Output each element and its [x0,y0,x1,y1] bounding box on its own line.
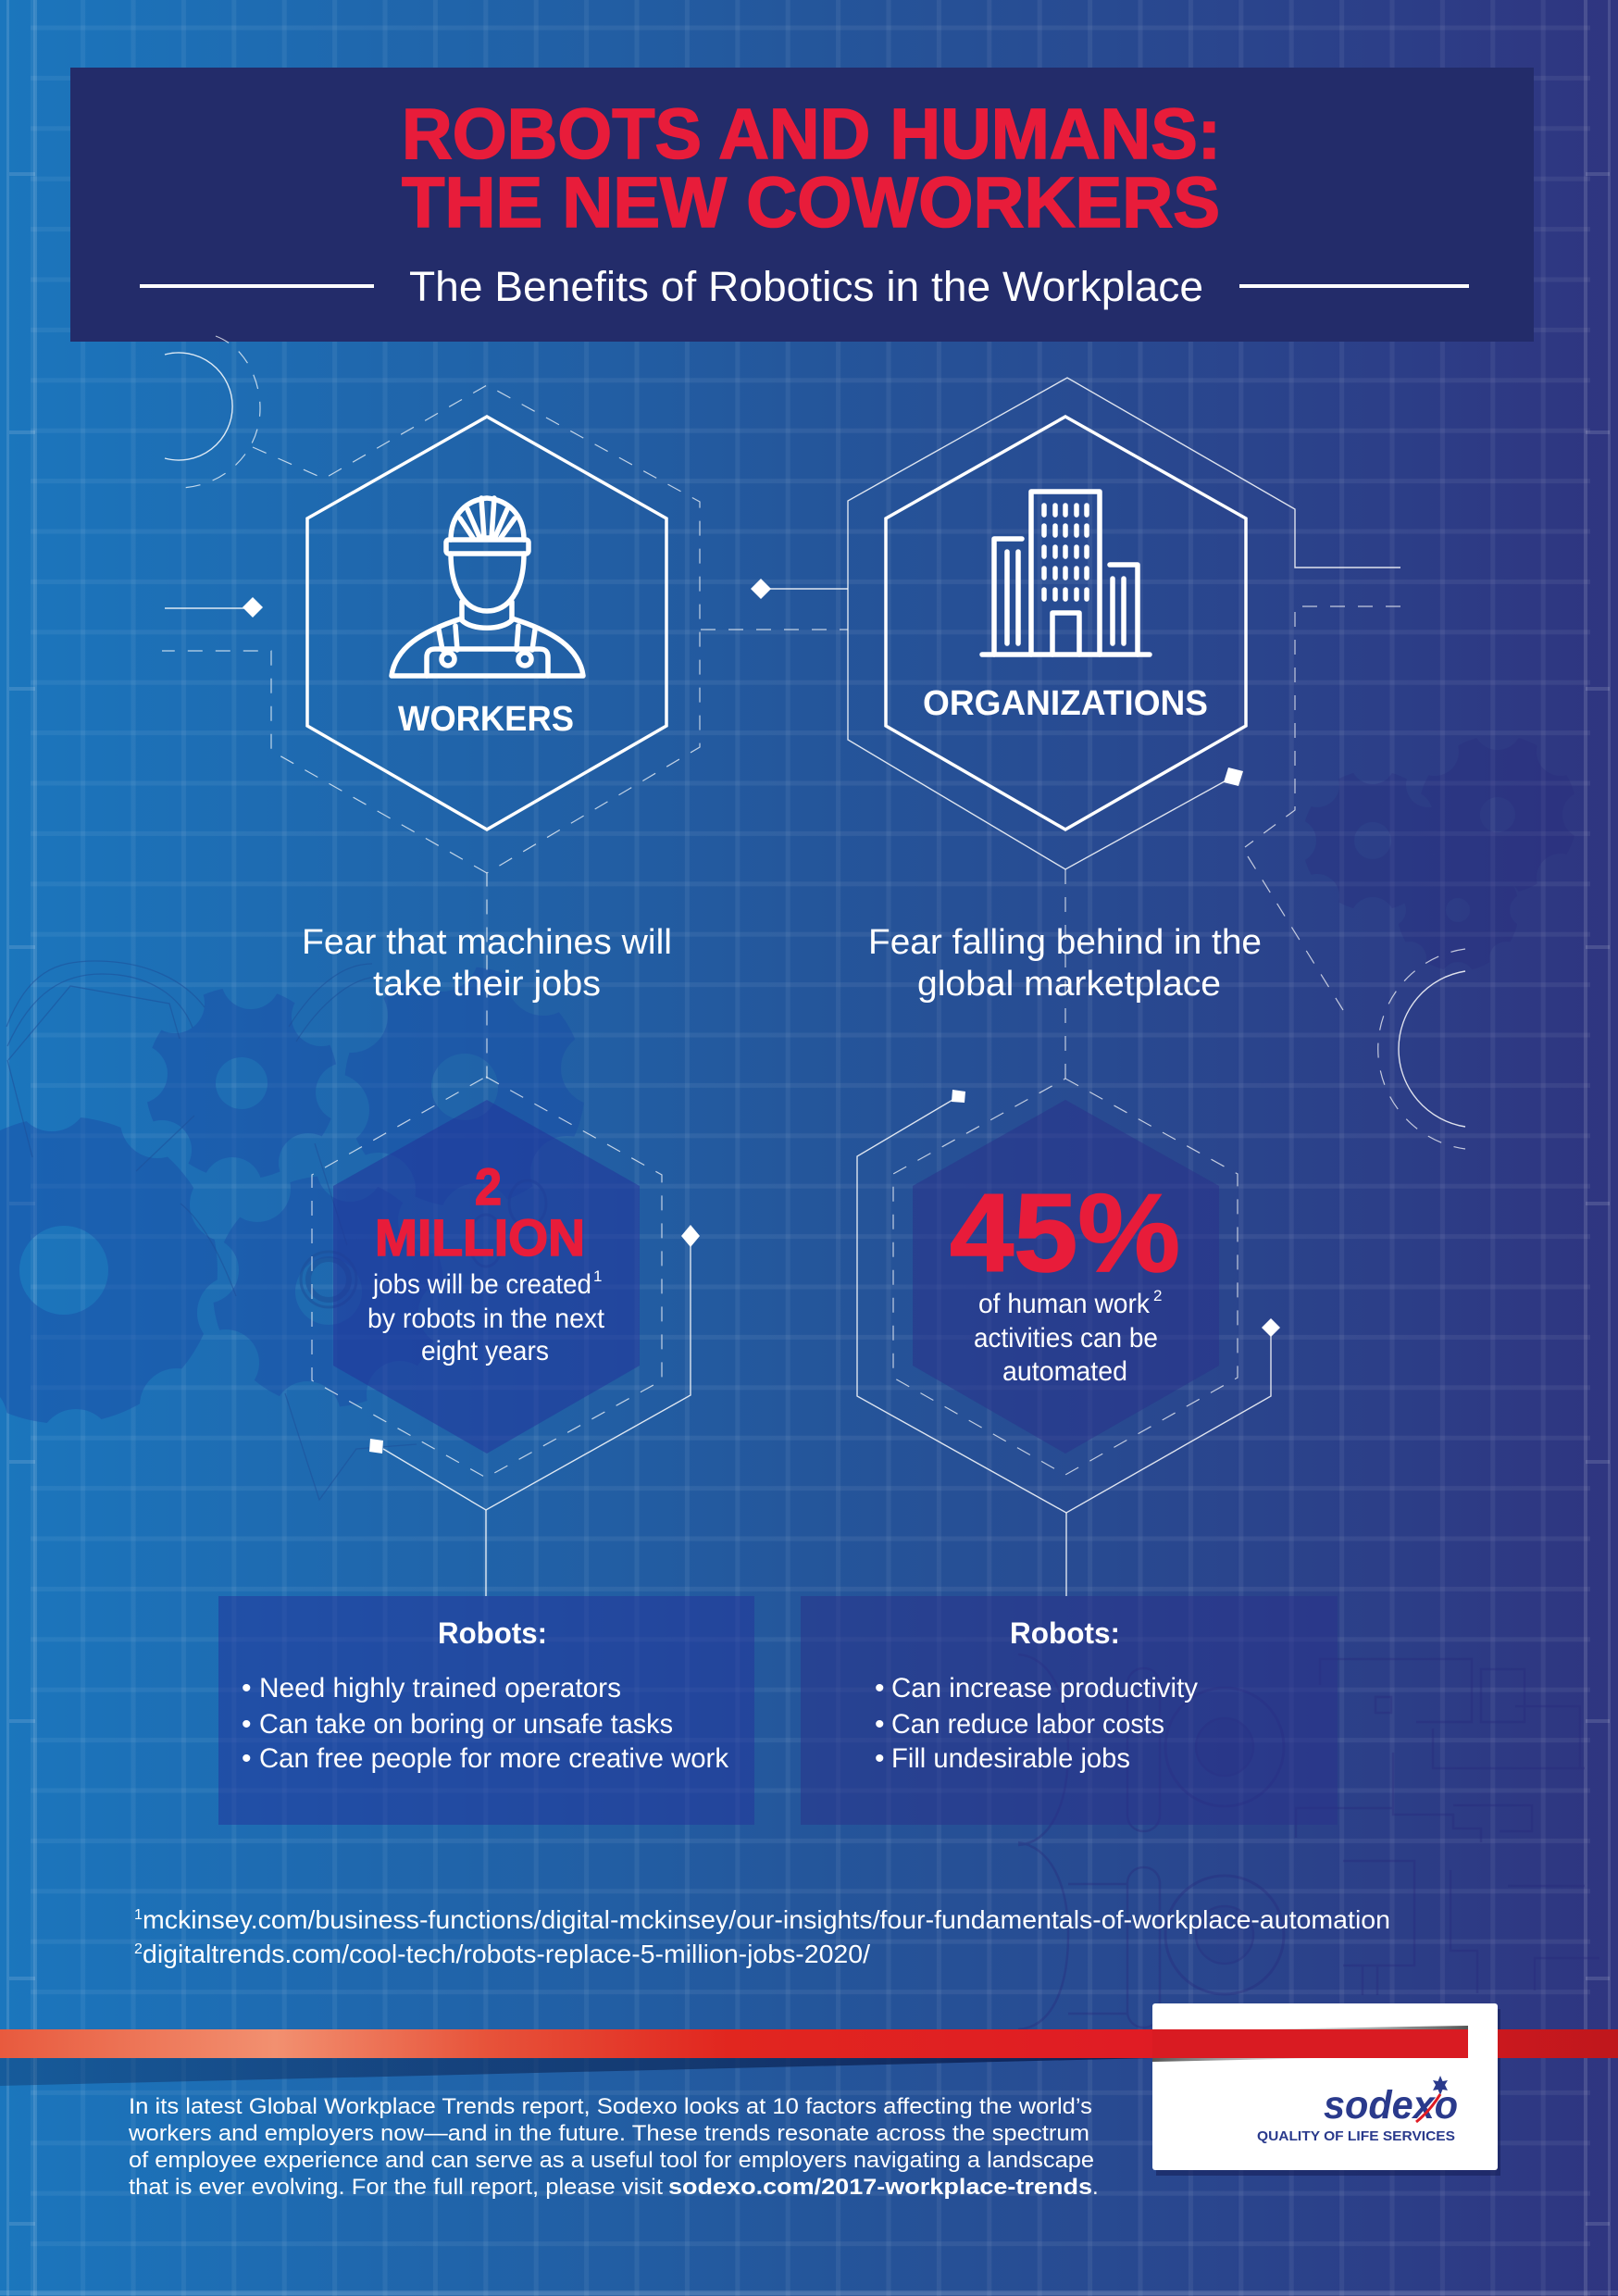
logo: sodexo [1324,2083,1458,2128]
text: organizations fear [868,923,1262,1004]
bullet list: • [242,1743,252,1774]
icon: worker with helmet [392,498,583,676]
panel: 45 percent statistic [857,1079,1280,1596]
number: 45% [950,1171,1180,1295]
bullet list: Can take on boring or unsafe tasks [259,1709,673,1740]
logo [1257,2076,1458,2144]
text: report summary: sodexo.com/2017-workplace-trends [668,2175,1092,2200]
text: report summary: workers and employers now—and in the future. These trends resonate across the spectrum [128,2121,1089,2146]
footnotes: digitaltrends.com/cool-tech/robots-replace-5-million-jobs-2020/ [143,1940,870,1968]
caption [974,1287,1162,1387]
bullet list: • [875,1673,885,1703]
title [402,94,1221,243]
background gears right [1314,774,1546,968]
footnotes: 1 [134,1907,143,1923]
footnotes: mckinsey.com/business-functions/digital-mckinsey/our-insights/four-fundamentals-of-workplace-automation [143,1905,1390,1934]
bullet list: Can reduce labor costs [891,1709,1164,1740]
caption: automated [1002,1356,1127,1387]
caption [367,1267,605,1366]
panel: workers hexagon [307,417,666,830]
icon: office buildings [982,492,1150,655]
text: report summary: that is ever evolving. For the full report, please visit [129,2175,663,2200]
subtitle [140,263,1469,310]
number: MILLION [375,1208,585,1267]
footnotes: 2 [134,1941,143,1957]
caption: 2 [1153,1287,1162,1304]
text: workers fear: Fear that machines will [302,923,672,962]
title: THE NEW COWORKERS [402,163,1220,243]
caption: 1 [593,1267,602,1285]
caption: by robots in the next [367,1304,605,1334]
card shadow [1156,2009,1500,2176]
text: workers fear: take their jobs [373,965,601,1004]
heading: Robots: [1010,1616,1120,1650]
decorative arc right [1378,949,1465,1149]
number [375,1157,585,1267]
bullet list [875,1673,1198,1774]
panel: robots list workers [218,1596,754,1825]
text: organizations fear: global marketplace [917,965,1221,1004]
panel: robots list organizations [801,1596,1338,1825]
heading: organizations: ORGANIZATIONS [923,684,1208,723]
bullet list: Can free people for more creative work [259,1743,729,1774]
background machine outlines lower right [1018,1654,1599,2029]
bullet list: Can increase productivity [891,1673,1198,1703]
panel: organizations hexagon [848,378,1400,1079]
bullet list: • [242,1673,252,1703]
footnotes [134,1905,1390,1968]
background gears left [0,967,585,1424]
bullet list [242,1673,729,1774]
subtitle: The Benefits of Robotics in the Workplace [409,263,1203,310]
text: report summary: of employee experience and can serve as a useful tool for employers navigating a landscape [129,2148,1094,2173]
background gear outlines [6,961,546,1500]
text: workers fear [302,923,672,1004]
caption: eight years [421,1336,549,1366]
text: organizations fear: Fear falling behind in the [868,923,1262,962]
bullet list: • [875,1743,885,1774]
bullet list: Fill undesirable jobs [891,1743,1130,1774]
bullet list: • [242,1709,252,1740]
bullet list: Need highly trained operators [259,1673,621,1703]
connector diamond left [165,597,263,618]
decorative arc top left with dashes [162,336,700,1079]
heading: workers: WORKERS [398,700,574,739]
text: report summary: In its latest Global Workplace Trends report, Sodexo looks at 10 factors affecting the world’s [129,2094,1092,2119]
title: ROBOTS AND HUMANS: [402,94,1221,174]
heading: Robots: [438,1616,547,1650]
red band [0,2029,1618,2058]
sodexo logo card [1152,2003,1498,2170]
text: report summary [128,2094,1099,2200]
bullet list: • [875,1709,885,1740]
caption: of human work [978,1289,1151,1319]
caption: jobs will be created [372,1269,591,1300]
caption: activities can be [974,1323,1158,1354]
panel: 2 million statistic [312,1077,700,1596]
text: report summary: . [1092,2175,1099,2200]
number: 2 [475,1157,502,1216]
connector between hexagons [701,579,848,630]
logo: QUALITY OF LIFE SERVICES [1257,2128,1455,2144]
title banner [70,68,1534,342]
red band shadow [0,2058,1152,2086]
